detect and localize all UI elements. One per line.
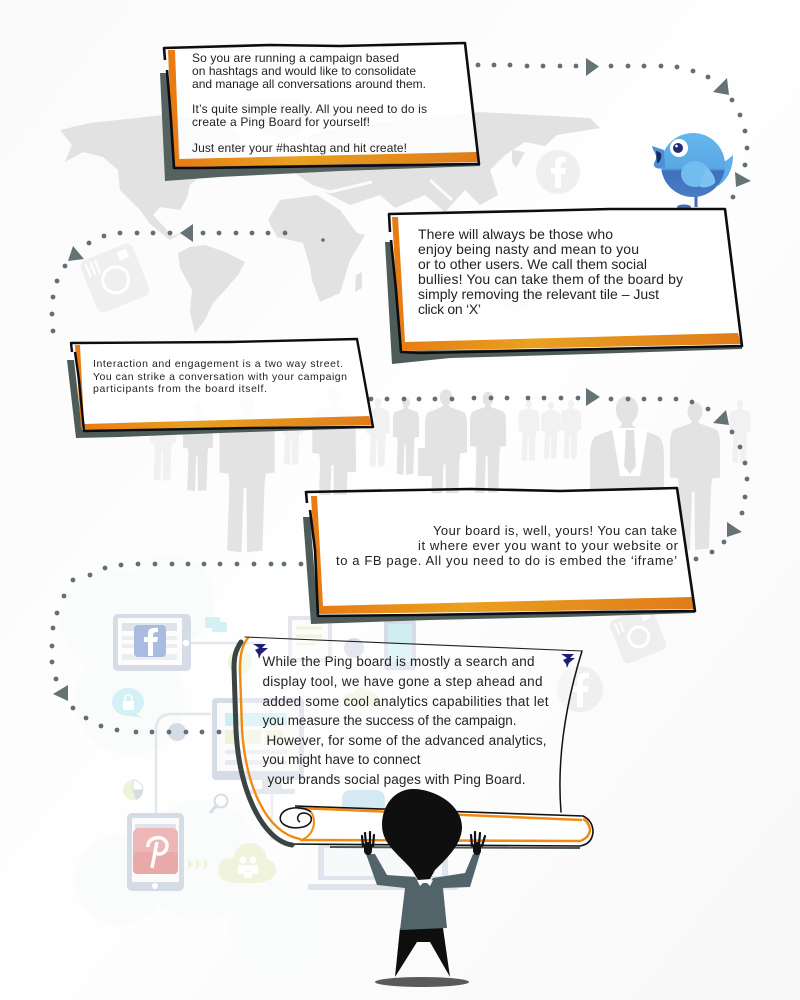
shadow	[375, 977, 469, 987]
connector lines	[156, 643, 272, 840]
icon: instagram left	[79, 242, 151, 314]
icon: tablet with pinterest tile	[127, 813, 184, 891]
text block: step 5: display tool, we have gone a step ahead and	[262, 674, 542, 689]
text block: step 1: and manage all conversations around them.	[192, 77, 426, 91]
figure: person holding scroll	[362, 789, 485, 987]
text block: step 1: So you are running a campaign based	[192, 51, 399, 65]
text block: step 4: it where ever you want to your website or	[418, 538, 679, 553]
icon: yellow pie	[123, 780, 143, 800]
panel: step 4 embed	[303, 488, 695, 624]
icon: magnifier	[210, 794, 228, 813]
icon: small pie top	[344, 638, 364, 658]
text block: step 2: There will always be those who	[418, 226, 613, 242]
icon: facebook circle lower	[557, 666, 603, 712]
dotted path 2 with arrows	[50, 224, 325, 333]
icon: push pin left	[253, 644, 268, 659]
text block: step 5: While the Ping board is mostly a search and	[262, 654, 534, 669]
text block: step 5: your brands social pages with Ping Board.	[268, 772, 526, 787]
dotted path 3 with arrows	[369, 388, 749, 561]
text block: step 5: you measure the success of the campaign.	[262, 713, 516, 728]
icon: tablet with facebook tile	[113, 614, 191, 671]
scroll outline	[234, 637, 582, 845]
scroll roller	[280, 806, 593, 848]
icon: blue bird	[652, 133, 733, 210]
icon: chat bubbles	[205, 617, 227, 632]
icon: document top	[288, 616, 332, 662]
torso and arms	[366, 854, 480, 930]
text block: step 3: Interaction and engagement is a two way street.	[93, 358, 343, 370]
panel: step 3 interaction	[67, 339, 373, 438]
text block: step 2: enjoy being nasty and mean to you	[418, 241, 639, 257]
text block: step 1	[192, 51, 427, 155]
text block: step 5: added some cool analytics capabilities that let	[262, 694, 549, 709]
text block: step 5: you might have to connect	[262, 752, 421, 767]
icon: pie chart gray	[168, 723, 186, 741]
icon: people cloud	[218, 843, 276, 883]
text block: step 3: You can strike a conversation with your campaign	[93, 371, 347, 383]
text block: step 2: or to other users. We call them social	[418, 256, 647, 272]
text block: step 2	[418, 226, 683, 317]
head	[382, 789, 462, 880]
text block: step 5: However, for some of the advanced analytics,	[266, 733, 546, 748]
social media background icons	[112, 614, 458, 891]
text block: step 4	[336, 523, 679, 568]
pale cloud blotches	[60, 555, 330, 980]
text block: step 1: Just enter your #hashtag and hit create!	[192, 141, 407, 155]
text block: step 1: It’s quite simple really. All you need to do is	[192, 102, 427, 116]
icon: facebook circle upper	[536, 150, 580, 194]
icon: lock bubble	[112, 688, 144, 718]
dotted path 1 with arrows	[476, 58, 751, 199]
icon: small chevrons	[188, 859, 209, 869]
text block: step 3	[93, 358, 347, 395]
left hand	[362, 832, 374, 851]
icon: laptop	[308, 843, 458, 890]
text block: step 3: participants from the board itself.	[93, 383, 267, 395]
collar	[417, 880, 433, 886]
text block: step 2: click on ‘X’	[418, 301, 481, 317]
icon: yellow clouds in scroll	[228, 650, 379, 708]
text block: step 4: to a FB page. All you need to do is embed the ‘iframe’	[336, 553, 677, 568]
icon: phone top	[384, 620, 416, 670]
icon: push pin right	[561, 654, 575, 668]
text block: step 2: simply removing the relevant tile – Just	[418, 286, 659, 302]
panel: step 1 campaign hashtags	[160, 43, 480, 181]
icon: instagram right	[608, 605, 668, 665]
right hand	[471, 832, 485, 851]
panel: step 2 social bullies	[385, 209, 742, 364]
world map silhouette	[60, 100, 600, 333]
legs	[395, 928, 450, 977]
icon: monitor with dashboard	[212, 698, 304, 794]
dotted path 4 with arrow	[50, 562, 303, 734]
panel: scroll with analytics text	[233, 637, 593, 848]
text block: step 1: on hashtags and would like to consolidate	[192, 64, 416, 78]
text block: step 4: Your board is, well, yours! You can take	[433, 523, 677, 538]
business people silhouettes	[150, 388, 751, 614]
text block: step 2: bullies! You can take them of the board by	[418, 271, 683, 287]
text block: step 5	[262, 654, 549, 787]
text block: step 1: create a Ping Board for yourself!	[192, 115, 370, 129]
icon: cyan cloud behind head	[342, 790, 385, 808]
